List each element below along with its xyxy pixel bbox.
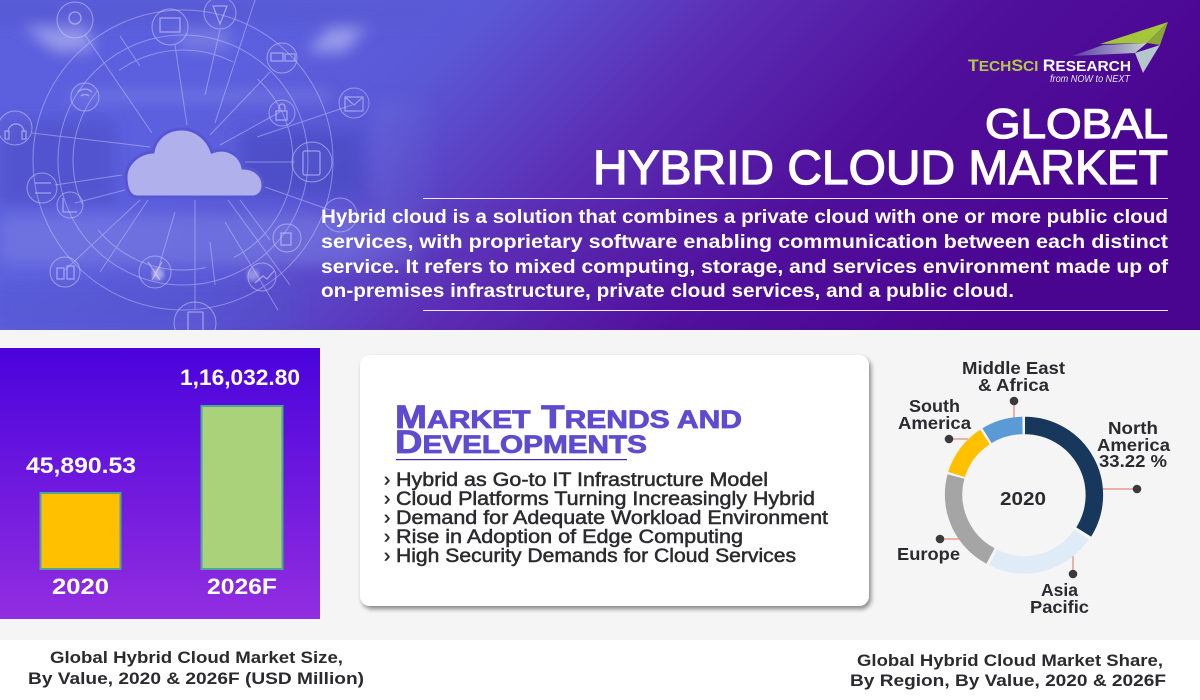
card heading: MARKET TRENDS AND: [395, 399, 742, 435]
trend list: ›: [384, 527, 390, 548]
trend list: ›: [384, 489, 390, 510]
segment: North America: [1025, 426, 1094, 532]
trend list: [384, 470, 829, 567]
logo wordmark: TECHSCI RESEARCH: [968, 56, 1131, 75]
label: Middle East and Africa: & Africa: [978, 375, 1049, 395]
text block: description: on-premises infrastructure, private cloud services, and a public cloud.: [321, 280, 1014, 302]
centre year: 2020: [1000, 489, 1046, 509]
value 2020: 45,890.53: [26, 453, 136, 478]
segment: Middle East and Africa: [987, 426, 1022, 436]
panel: header banner: [0, 0, 1200, 344]
trend list: Demand for Adequate Workload Environment: [396, 508, 829, 529]
logo: TechSci Research: [968, 22, 1168, 85]
satellite icon circles: [0, 0, 369, 344]
trend list: High Security Demands for Cloud Services: [396, 546, 796, 567]
divider rule top: [423, 198, 1168, 199]
trend list: ›: [384, 508, 390, 529]
card heading: DEVELOPMENTS: [395, 424, 647, 460]
trend list: ›: [384, 546, 390, 567]
label: South America: [898, 396, 971, 433]
text block: description: Hybrid cloud is a solution that combines a private cloud with one or more public cloud: [321, 206, 1168, 228]
panel: bar chart: [0, 348, 320, 619]
lens glows: [152, 268, 164, 280]
logo mark: [1072, 22, 1168, 73]
title: [593, 100, 1168, 195]
label: North America: North: [1108, 418, 1158, 438]
bar 2026F: [202, 406, 282, 569]
logo tagline: from NOW to NEXT: [1050, 74, 1131, 85]
label: North America: America: [1097, 435, 1170, 455]
caption: market share: By Region, By Value, 2020 & 2026F: [850, 672, 1166, 690]
label: South America: South: [909, 396, 960, 416]
value 2026F: 1,16,032.80: [180, 365, 300, 390]
title: GLOBAL: [985, 100, 1168, 147]
heading underline: [396, 459, 627, 460]
caption: market size: By Value, 2020 & 2026F (USD Million): [28, 670, 364, 688]
segment: Europe: [954, 476, 990, 556]
label 2020: 2020: [52, 574, 109, 599]
leader dots: [936, 397, 1141, 578]
text block: description: [321, 206, 1169, 302]
caption: market size: Global Hybrid Cloud Market Size,: [50, 649, 343, 667]
label: Asia Pacific: Asia: [1041, 580, 1078, 600]
network diagram: [32, 0, 352, 310]
label: Europe: Europe: [897, 544, 960, 564]
segment: Asia Pacific: [993, 534, 1082, 565]
divider rule bottom: [423, 310, 1168, 311]
caption: market share: [850, 652, 1166, 690]
label: Middle East and Africa: Middle East: [962, 358, 1065, 378]
page background band: [0, 330, 1200, 640]
card heading: [395, 399, 742, 460]
label: North America: 33.22 %: [1099, 451, 1167, 471]
bar 2020: [40, 493, 120, 569]
trend list: ›: [384, 470, 390, 491]
donut chart: [897, 358, 1170, 617]
panel: market trends card: [360, 355, 869, 606]
trend list: Rise in Adoption of Edge Computing: [396, 527, 743, 548]
label 2026F: 2026F: [207, 574, 277, 599]
trend list: Cloud Platforms Turning Increasingly Hybrid: [396, 489, 815, 510]
caption: market share: Global Hybrid Cloud Market Share,: [857, 652, 1163, 670]
label: Asia Pacific: Pacific: [1030, 597, 1089, 617]
icon: cloud: [126, 129, 263, 197]
label: North America: [1097, 418, 1170, 471]
label: South America: America: [898, 413, 971, 433]
blurred data centre backdrop: [0, 20, 418, 270]
leader lines: [941, 401, 1137, 574]
icon glyph marks: [5, 6, 363, 336]
label: Middle East and Africa: [962, 358, 1065, 395]
segment: South America: [956, 437, 985, 474]
trend list: Hybrid as Go-to IT Infrastructure Model: [396, 470, 768, 491]
text block: description: services, with proprietary software enabling communication between each distinct: [321, 231, 1169, 253]
text block: description: service. It refers to mixed computing, storage, and services environment made up of: [321, 256, 1169, 278]
title: HYBRID CLOUD MARKET: [593, 142, 1168, 195]
caption: market size: [28, 649, 364, 688]
label: Asia Pacific: [1030, 580, 1089, 617]
